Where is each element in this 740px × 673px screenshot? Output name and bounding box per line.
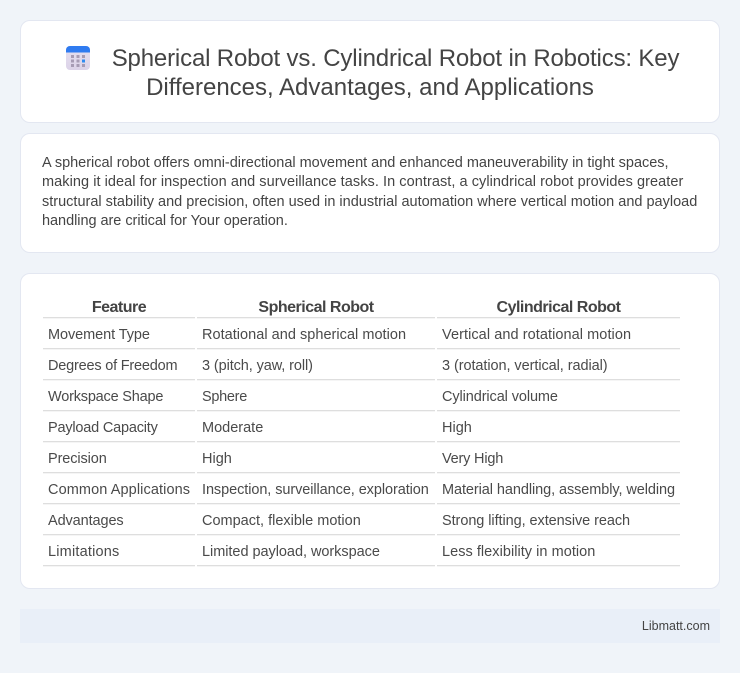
row: advantages: Advantages	[48, 513, 124, 529]
text block: introduction	[42, 154, 697, 229]
row: limitations: Limitations	[48, 544, 120, 560]
row: common applications: Common Applications	[48, 482, 190, 498]
text: Cylindrical volume	[442, 389, 558, 405]
row: movement type: Movement Type	[48, 327, 150, 343]
panel: header	[20, 20, 720, 123]
text block: introduction: A spherical robot offers omni-directional movement and enhanced maneuverability in tight spaces,	[42, 154, 668, 170]
text: Sphere	[202, 389, 247, 405]
panel: comparison table	[20, 273, 720, 589]
row: degrees of freedom: Degrees of Freedom	[48, 358, 177, 374]
text: Vertical and rotational motion	[442, 327, 631, 343]
title	[112, 45, 680, 101]
text: Less flexibility in motion	[442, 544, 595, 560]
text block: introduction: handling are critical for Your operation.	[42, 213, 288, 229]
table header: spherical robot: Spherical Robot	[258, 299, 374, 316]
text: Material handling, assembly, welding	[442, 482, 675, 498]
row: workspace shape: Workspace Shape	[48, 389, 163, 405]
table header: feature: Feature	[92, 299, 146, 316]
text: Very High	[442, 451, 503, 467]
text: Moderate	[202, 420, 263, 436]
row: precision: Precision	[48, 451, 107, 467]
footer bar	[20, 609, 720, 643]
text: Limited payload, workspace	[202, 544, 380, 560]
icon: calendar	[66, 46, 90, 70]
text: 3 (rotation, vertical, radial)	[442, 358, 608, 374]
text: High	[442, 420, 472, 436]
footer source text: Libmatt.com	[642, 619, 710, 633]
panel: introduction	[20, 133, 720, 253]
title: Differences, Advantages, and Applications	[146, 74, 594, 101]
row: payload capacity: Payload Capacity	[48, 420, 158, 436]
text: Compact, flexible motion	[202, 513, 361, 529]
title: Spherical Robot vs. Cylindrical Robot in Robotics: Key	[112, 45, 679, 72]
text: Inspection, surveillance, exploration	[202, 482, 429, 498]
text block: introduction: structural stability and precision, often used in industrial automation where vertical motion and payload	[42, 194, 697, 210]
table header: cylindrical robot: Cylindrical Robot	[497, 299, 620, 316]
text: 3 (pitch, yaw, roll)	[202, 358, 313, 374]
text block: introduction: making it ideal for inspection and surveillance tasks. In contrast, a cylindrical robot provides greater	[42, 174, 683, 190]
text: High	[202, 451, 232, 467]
text: Rotational and spherical motion	[202, 327, 406, 343]
text: Strong lifting, extensive reach	[442, 513, 630, 529]
